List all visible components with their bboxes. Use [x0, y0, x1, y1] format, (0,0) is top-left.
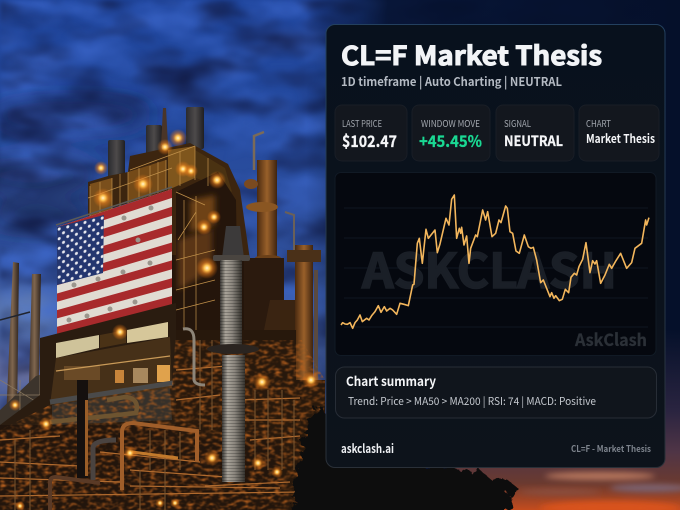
- tree silhouette: [290, 404, 520, 510]
- watermark: ASKCLASH: ASKCLASH: [361, 232, 617, 302]
- line chart panel: [335, 172, 656, 356]
- refinery: chimneys on the left: [0, 262, 56, 430]
- stat card: window move: +45.45%: [419, 128, 482, 152]
- refinery: structure under the flag: [0, 303, 176, 510]
- price line: [341, 195, 649, 328]
- stat card: signal: [496, 105, 574, 161]
- stat card: chart: [579, 105, 659, 161]
- refinery: orange detail texture: [0, 340, 325, 510]
- refinery: American flag: [56, 187, 172, 335]
- refinery: right tower: [244, 132, 296, 348]
- title: CL=F Market Thesis: [341, 36, 602, 73]
- chart summary box: Chart summary: [346, 371, 436, 390]
- stat card: chart: Market Thesis: [586, 130, 655, 147]
- stat card: last price: $102.47: [342, 128, 397, 152]
- stat card: last price: [335, 105, 407, 161]
- refinery: smoke stacks on top: [108, 107, 204, 178]
- background: dusk glow at bottom right: [450, 330, 680, 510]
- chart summary box: [336, 367, 656, 418]
- stat card: signal: SIGNAL: [504, 117, 531, 130]
- refinery: lower pipe rack: [0, 329, 325, 510]
- stat card: last price: LAST PRICE: [342, 117, 382, 130]
- stat card: window move: [412, 105, 490, 161]
- stat card: chart: CHART: [586, 117, 612, 130]
- refinery: main silver column: [207, 226, 259, 482]
- watermark: AskClash: AskClash: [574, 326, 647, 351]
- refinery: lights: [9, 129, 320, 510]
- panel: market thesis card: [326, 24, 665, 468]
- refinery: upper scaffold: [88, 143, 250, 355]
- subtitle: 1D timeframe | Auto Charting | NEUTRAL: [341, 73, 562, 90]
- footer: chart label: CL=F - Market Thesis: [571, 442, 651, 455]
- chart summary box: Trend: Price > MA50 > MA200 | RSI: 74 | MACD: Positive: [348, 394, 596, 409]
- stat card: signal: NEUTRAL: [504, 131, 563, 151]
- footer: site name: askclash.ai: [341, 440, 394, 457]
- stat card: window move: WINDOW MOVE: [421, 117, 480, 130]
- refinery: far right column: [280, 212, 321, 405]
